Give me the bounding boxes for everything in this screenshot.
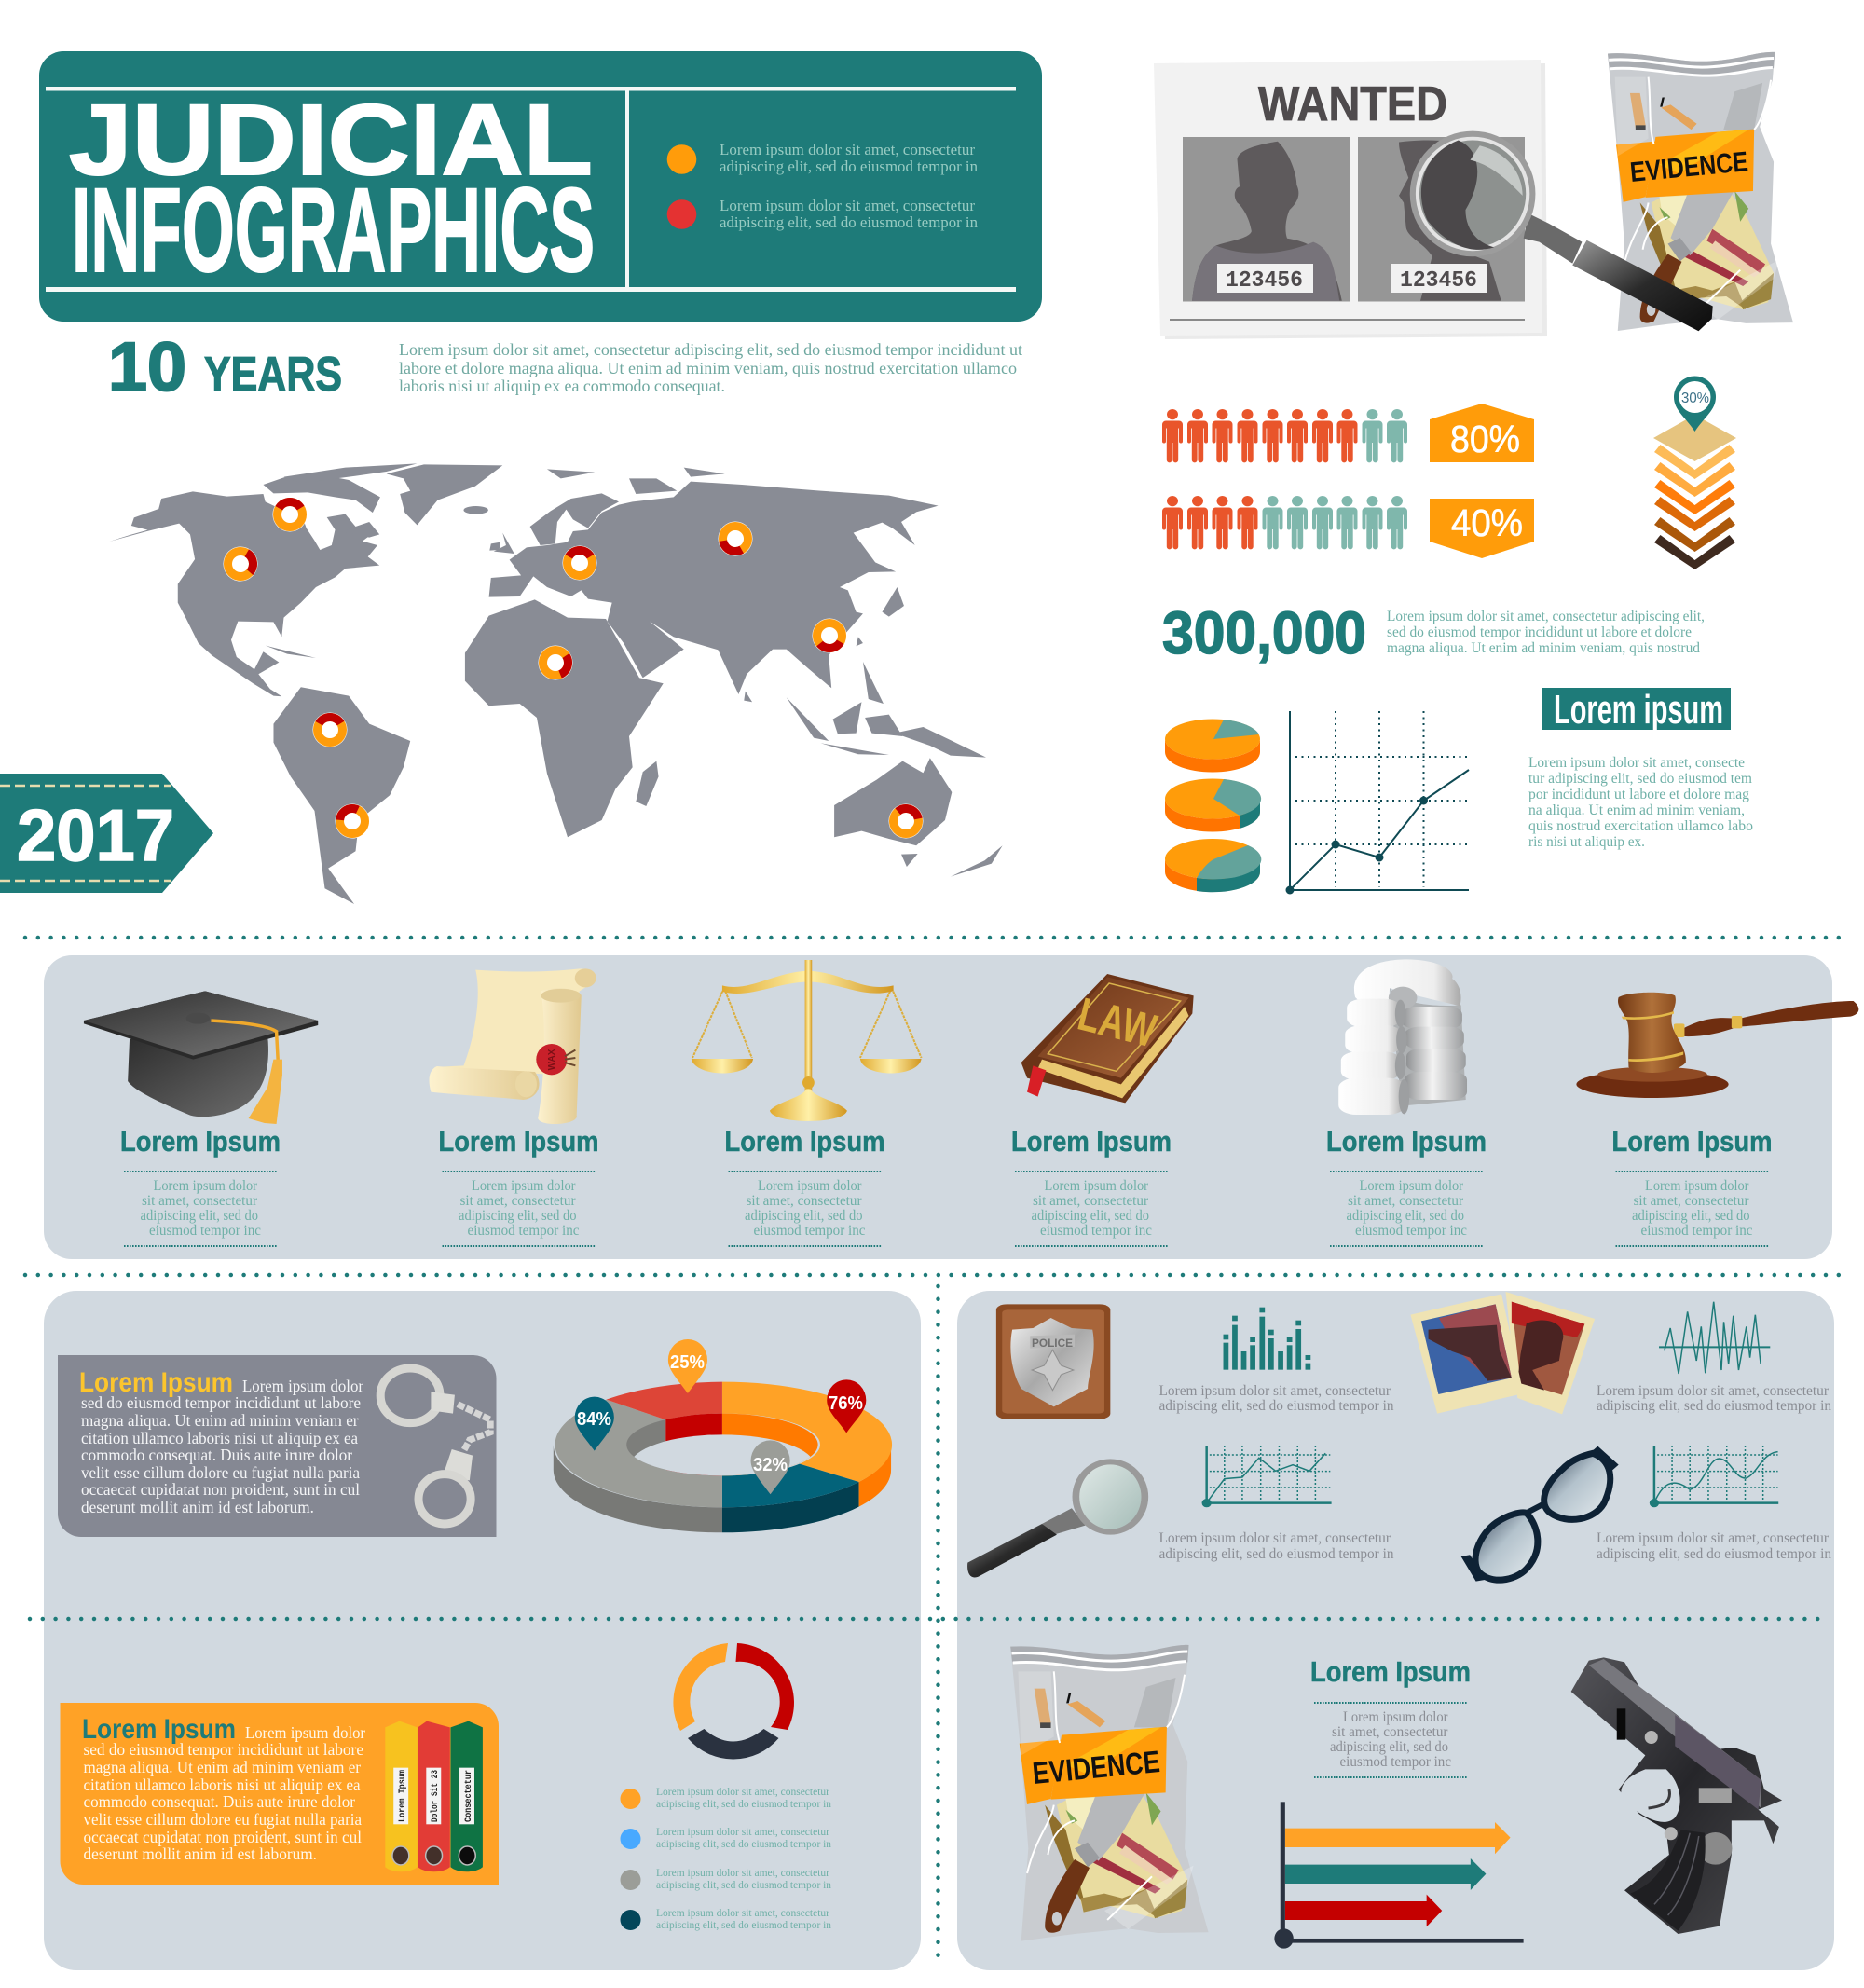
evidence bag, bottom	[1010, 1645, 1209, 1941]
column text: Lorem ipsum dolor	[1645, 1178, 1749, 1194]
icon: curve chart small	[1650, 1446, 1778, 1507]
icon: police badge: POLICE	[1032, 1337, 1073, 1350]
pie one	[1165, 720, 1260, 773]
bottom right heading and text: Lorem Ipsum	[1310, 1655, 1471, 1688]
legend item	[621, 1785, 831, 1810]
legend item	[621, 1825, 831, 1850]
callout: orange binders box	[60, 1703, 499, 1885]
text: badge: adipiscing elit, sed do eiusmod tempor in	[1159, 1398, 1394, 1414]
pie three	[1165, 839, 1261, 892]
icon: handcuffs	[380, 1368, 490, 1524]
column text: eiusmod tempor inc	[753, 1223, 866, 1239]
title banner	[39, 51, 1042, 322]
text: glasses: adipiscing elit, sed do eiusmod tempor in	[1597, 1546, 1831, 1562]
column text: eiusmod tempor inc	[149, 1223, 261, 1239]
bullet: red	[667, 199, 696, 229]
column text: Lorem ipsum dolor	[153, 1178, 258, 1194]
callout text: sed do eiusmod tempor incididunt ut labore	[84, 1740, 363, 1759]
callout heading: Lorem Ipsum	[79, 1367, 233, 1398]
stat description: Lorem ipsum dolor sit amet, consectetur adipiscing elit,	[1387, 609, 1705, 624]
mugshot one: 123456	[1226, 268, 1303, 294]
bottom right heading and text: sit amet, consectetur	[1332, 1724, 1448, 1740]
callout text: deserunt mollit anim id est laborum.	[81, 1498, 314, 1516]
mugshot one	[1183, 137, 1350, 302]
legend item	[621, 1906, 831, 1931]
panel: handcuffs and donut	[44, 1291, 921, 1970]
side paragraph	[1528, 755, 1753, 850]
evidence bag, top: EVIDENCE	[1629, 146, 1749, 188]
column text: sit amet, consectetur	[1348, 1193, 1464, 1209]
side paragraph: tur adipiscing elit, sed do eiusmod tem	[1528, 771, 1752, 787]
column heading: Lorem Ipsum	[120, 1125, 281, 1158]
map marker	[538, 645, 573, 680]
icon: law book: LAW	[1073, 988, 1162, 1058]
column text: Lorem ipsum dolor	[1044, 1178, 1149, 1194]
callout text: citation ullamco laboris nisi ut aliquip ex ea	[84, 1775, 361, 1794]
intro paragraph: labore et dolore magna aliqua. Ut enim ad minim veniam, quis nostrud exercitation ullamco	[399, 359, 1017, 377]
title: judicial: JUDICIAL	[69, 83, 593, 196]
map marker	[272, 498, 308, 531]
donut label: 76%: 76%	[829, 1393, 863, 1414]
year ribbon 2017: 2017	[17, 794, 174, 876]
text: photos	[1597, 1383, 1831, 1414]
icon: binders: Dolor Sit 23	[430, 1770, 441, 1822]
legend item: adipiscing elit, sed do eiusmod tempor in	[656, 1797, 831, 1810]
column text: eiusmod tempor inc	[1355, 1223, 1467, 1239]
wanted poster	[1154, 60, 1547, 339]
intro paragraph: laboris nisi ut aliquip ex ea commodo consequat.	[399, 377, 725, 395]
people stat 40%	[1162, 496, 1534, 558]
icon: line chart small	[1202, 1446, 1332, 1507]
3d donut chart	[554, 1339, 892, 1532]
bottom right heading and text: adipiscing elit, sed do	[1330, 1739, 1448, 1755]
column text: eiusmod tempor inc	[1040, 1223, 1152, 1239]
callout text: deserunt mollit anim id est laborum.	[84, 1844, 317, 1863]
stat: 10 years	[108, 328, 342, 405]
icon: binders	[385, 1721, 483, 1871]
icon: graduation cap	[84, 991, 318, 1124]
text: badge: Lorem ipsum dolor sit amet, consectetur	[1159, 1383, 1391, 1399]
icon: law book	[1021, 974, 1194, 1103]
bullet: orange	[667, 144, 696, 174]
panel: legal symbols	[44, 955, 1832, 1259]
column: wig	[1326, 1125, 1487, 1246]
column text	[1346, 1178, 1467, 1239]
panel: evidence items	[957, 1291, 1834, 1970]
map marker	[813, 619, 846, 652]
bullet text two: Lorem ipsum dolor sit amet, consectetur	[720, 197, 976, 214]
callout text: citation ullamco laboris nisi ut aliquip ex ea	[81, 1429, 358, 1447]
callout text: commodo consequat. Duis aute irure dolor	[81, 1446, 352, 1464]
column text: adipiscing elit, sed do	[459, 1208, 577, 1224]
column text: Lorem ipsum dolor	[758, 1178, 862, 1194]
column text: sit amet, consectetur	[460, 1193, 576, 1209]
column text: adipiscing elit, sed do	[140, 1208, 258, 1224]
pin	[1674, 377, 1716, 432]
icon: pistol	[1571, 1657, 1782, 1934]
column text	[140, 1178, 261, 1239]
text: magnifier: Lorem ipsum dolor sit amet, consectetur	[1159, 1530, 1391, 1546]
title banner: adipiscing elit, sed do eiusmod tempor in	[720, 158, 978, 175]
bottom right heading and text: Lorem ipsum dolor	[1343, 1709, 1448, 1725]
arrow: orange	[1285, 1822, 1511, 1854]
icon: scales of justice	[692, 960, 922, 1121]
icon: gavel	[1576, 993, 1858, 1098]
side paragraph: quis nostrud exercitation ullamco labo	[1528, 818, 1753, 834]
people stat 80%: 80%	[1450, 418, 1520, 460]
column heading: Lorem Ipsum	[1011, 1125, 1172, 1158]
column: gavel	[1612, 1125, 1773, 1246]
column text: adipiscing elit, sed do	[1632, 1208, 1750, 1224]
column text: eiusmod tempor inc	[1640, 1223, 1753, 1239]
column: book	[1011, 1125, 1172, 1246]
icon: binders: Consectetur	[463, 1770, 474, 1822]
heading box: lorem ipsum	[1542, 687, 1731, 733]
side paragraph: na aliqua. Ut enim ad minim veniam,	[1528, 802, 1745, 818]
column text: eiusmod tempor inc	[468, 1223, 580, 1239]
callout text: occaecat cupidatat non proident, sunt in cul	[81, 1480, 360, 1499]
layered chevron chart with 30% pin	[1653, 377, 1736, 569]
evidence bag, top	[1608, 52, 1793, 331]
icon: judge wig	[1338, 959, 1467, 1115]
column: cap	[120, 1125, 281, 1246]
text: magnifier	[1159, 1530, 1394, 1562]
column text	[1632, 1178, 1753, 1239]
year ribbon 2017	[0, 774, 213, 893]
callout text: magna aliqua. Ut enim ad minim veniam er	[84, 1758, 361, 1776]
icon: binders: Lorem Ipsum	[397, 1770, 408, 1822]
arrow bar chart	[1274, 1802, 1524, 1949]
column text: Lorem ipsum dolor	[1359, 1178, 1464, 1194]
map marker	[224, 546, 257, 582]
side paragraph: por incididunt ut labore et dolore mag	[1528, 787, 1749, 802]
column heading: Lorem Ipsum	[1326, 1125, 1487, 1158]
legend item: adipiscing elit, sed do eiusmod tempor in	[656, 1918, 831, 1931]
icon: bar chart	[1224, 1308, 1310, 1370]
ring chart	[673, 1643, 794, 1760]
callout text: velit esse cillum dolore eu fugiat nulla paria	[84, 1810, 362, 1829]
icon: polaroid photos	[1410, 1292, 1595, 1414]
icon: magnifying glass	[967, 1459, 1148, 1577]
pin: 30%	[1681, 391, 1709, 406]
bottom right heading and text	[1310, 1655, 1471, 1777]
column text	[459, 1178, 580, 1239]
pie two	[1165, 779, 1261, 831]
icon: police badge	[996, 1304, 1110, 1419]
column text: sit amet, consectetur	[142, 1193, 258, 1209]
title banner: adipiscing elit, sed do eiusmod tempor in	[720, 213, 978, 231]
callout text: sed do eiusmod tempor incididunt ut labore	[81, 1393, 361, 1412]
legend item: Lorem ipsum dolor sit amet, consectetur	[656, 1906, 829, 1919]
column text: sit amet, consectetur	[1633, 1193, 1749, 1209]
column text: sit amet, consectetur	[1033, 1193, 1149, 1209]
icon: scroll	[429, 968, 596, 1124]
text: badge	[1159, 1383, 1394, 1414]
map marker	[336, 803, 369, 839]
text: glasses: Lorem ipsum dolor sit amet, consectetur	[1597, 1530, 1830, 1546]
intro paragraph: Lorem ipsum dolor sit amet, consectetur adipiscing elit, sed do eiusmod tempor incididunt ut	[399, 340, 1022, 359]
map marker	[888, 803, 924, 839]
stat description: sed do eiusmod tempor incididunt ut labore et dolore	[1387, 624, 1692, 640]
arrow: teal	[1285, 1858, 1486, 1890]
side paragraph: Lorem ipsum dolor sit amet, consecte	[1528, 755, 1745, 771]
column text: sit amet, consectetur	[746, 1193, 862, 1209]
column heading: Lorem Ipsum	[1612, 1125, 1773, 1158]
callout: grey handcuffs box	[58, 1355, 496, 1537]
column: scroll	[438, 1125, 598, 1246]
donut label: 25%: 25%	[670, 1352, 705, 1373]
heading box: lorem ipsum: Lorem ipsum	[1554, 687, 1723, 733]
legend item	[621, 1866, 831, 1891]
intro paragraph	[399, 340, 1022, 395]
map marker	[718, 522, 753, 555]
column text	[745, 1178, 866, 1239]
column text: Lorem ipsum dolor	[472, 1178, 576, 1194]
world map	[109, 463, 1003, 904]
legend item: Lorem ipsum dolor sit amet, consectetur	[656, 1866, 829, 1879]
legend item: Lorem ipsum dolor sit amet, consectetur	[656, 1785, 829, 1798]
column text: adipiscing elit, sed do	[745, 1208, 863, 1224]
arrow: red	[1285, 1895, 1442, 1926]
column heading: Lorem Ipsum	[438, 1125, 598, 1158]
callout text: Lorem ipsum dolor	[242, 1377, 363, 1395]
icon: glasses	[1461, 1446, 1619, 1582]
stat description	[1387, 609, 1705, 656]
line chart	[1286, 711, 1469, 895]
magnifying glass over poster	[1410, 131, 1713, 331]
callout text	[84, 1723, 365, 1863]
evidence bag, bottom: EVIDENCE	[1031, 1744, 1161, 1790]
text: photos: adipiscing elit, sed do eiusmod tempor in	[1597, 1398, 1831, 1414]
bullet text one: Lorem ipsum dolor sit amet, consectetur	[720, 141, 976, 158]
title: infographics: INFOGRAPHICS	[72, 164, 595, 297]
callout text: occaecat cupidatat non proident, sunt in cul	[84, 1828, 362, 1846]
donut label: 84%: 84%	[577, 1409, 611, 1430]
bottom right heading and text: eiusmod tempor inc	[1340, 1754, 1451, 1770]
icon: waveform	[1659, 1302, 1770, 1374]
column text	[1031, 1178, 1152, 1239]
mugshot two	[1358, 137, 1525, 302]
column: scales	[725, 1125, 885, 1246]
callout text: Lorem ipsum dolor	[245, 1723, 365, 1742]
callout heading: Lorem Ipsum	[82, 1714, 236, 1745]
dotted dividers	[25, 938, 1839, 1957]
legend	[621, 1785, 831, 1931]
people stat 40%: 40%	[1451, 501, 1523, 544]
stat description: magna aliqua. Ut enim ad minim veniam, quis nostrud	[1387, 640, 1700, 656]
callout text	[81, 1377, 363, 1516]
map marker	[563, 546, 596, 580]
text: magnifier: adipiscing elit, sed do eiusmod tempor in	[1159, 1546, 1394, 1562]
map marker	[313, 712, 347, 747]
mugshot two: 123456	[1400, 268, 1477, 294]
stacked pie charts	[1165, 720, 1261, 892]
donut label: 32%: 32%	[753, 1455, 788, 1475]
callout text: velit esse cillum dolore eu fugiat nulla paria	[81, 1463, 360, 1482]
stat: 10 years: YEARS	[204, 348, 342, 402]
stat: 10 years: 10	[108, 328, 186, 405]
wanted heading: WANTED	[1258, 77, 1447, 131]
seal lettering: WAX	[547, 1049, 557, 1070]
legend item: Lorem ipsum dolor sit amet, consectetur	[656, 1825, 829, 1838]
people stat 80%	[1162, 404, 1534, 462]
legend item: adipiscing elit, sed do eiusmod tempor in	[656, 1878, 831, 1891]
column heading: Lorem Ipsum	[725, 1125, 885, 1158]
column text: adipiscing elit, sed do	[1346, 1208, 1464, 1224]
callout text: commodo consequat. Duis aute irure dolor	[84, 1792, 355, 1811]
callout text: magna aliqua. Ut enim ad minim veniam er	[81, 1411, 359, 1430]
column text: adipiscing elit, sed do	[1031, 1208, 1149, 1224]
text: photos: Lorem ipsum dolor sit amet, consectetur	[1597, 1383, 1830, 1399]
text: glasses	[1597, 1530, 1831, 1562]
legend item: adipiscing elit, sed do eiusmod tempor in	[656, 1837, 831, 1850]
stat: 300,000: 300,000	[1162, 599, 1366, 666]
side paragraph: ris nisi ut aliquip ex.	[1528, 834, 1645, 850]
